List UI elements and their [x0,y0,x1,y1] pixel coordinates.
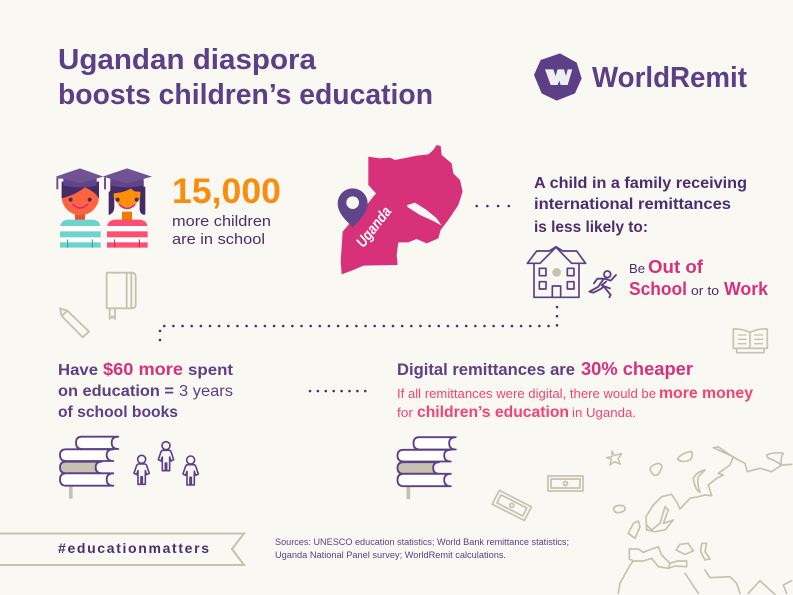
text: out of school or to work [629,256,769,299]
icon: banknote [548,476,583,491]
text: digital remittances cheaper [397,358,753,421]
text: child less likely: international remittances [534,196,731,213]
icon: school house [527,247,586,297]
text: digital remittances cheaper: 30% cheaper [581,358,693,379]
text: digital remittances cheaper: more money [659,385,753,402]
text: out of school or to work: Work [724,278,769,299]
icon: running child [589,271,616,297]
icon: open book [733,329,767,353]
text: $60 more spent on education: of school books [58,404,178,421]
sources [275,537,569,560]
child two [103,168,152,248]
text: out of school or to work: Be [629,262,645,276]
Middle East and Asia coast [685,570,792,594]
child one [56,168,103,248]
Novaya Zemlya [693,470,705,492]
text: $60 more spent on education [58,359,233,421]
text: digital remittances cheaper: If all remittances were digital, there would be [397,387,656,401]
text: $60 more spent on education: 3 years [179,383,233,400]
text: child less likely: is less likely to: [534,219,648,236]
sources: Uganda National Panel survey; WorldRemit calculations. [275,550,506,560]
stat: 15,000 more children: more children [172,213,271,230]
text: digital remittances cheaper: children’s education [417,404,569,421]
title: Ugandan diaspora [58,44,317,76]
text: out of school or to work: or to [691,284,719,298]
text: $60 more spent on education: $60 more [103,359,183,379]
child figure two [158,442,174,471]
text: $60 more spent on education: Have [58,362,98,379]
connector: dotted line from house to spend text [160,307,557,347]
logo: WorldRemit: WorldRemit [592,62,747,94]
text: out of school or to work: Out of [648,256,704,277]
icon: notebook [107,273,136,319]
icon: pencil [60,308,89,337]
text: out of school or to work: School [629,278,687,299]
label: Uganda: Uganda [353,203,395,251]
text: $60 more spent on education: on education = [58,383,174,400]
connector: map to text [477,205,512,207]
sources: Sources: UNESCO education statistics; World Bank remittance statistics; [275,537,569,547]
map: Uganda [338,145,463,274]
stat: 15,000 more children: 15,000 [172,172,281,211]
icon: tilted banknote [492,490,531,521]
icon: three children [134,442,198,485]
ribbon: #educationmatters: #educationmatters [58,540,209,556]
stat: 15,000 more children [172,172,281,248]
text: child less likely: A child in a family receiving [534,175,747,192]
text: digital remittances cheaper: for [397,406,413,420]
icon: two graduate children [56,168,152,248]
child figure one [134,455,149,484]
text: digital remittances cheaper: Digital remittances are [397,361,575,379]
connector: spend text to digital text [310,390,366,392]
stat: 15,000 more children: are in school [172,231,265,248]
child figure three [183,456,198,485]
icon: location pin [338,188,368,227]
title: boosts children’s education [58,79,433,111]
ribbon: #educationmatters [0,534,244,565]
icon: star [607,451,622,465]
islands of the arctic [613,452,783,513]
Scandinavia [647,507,673,532]
text: $60 more spent on education: spent [188,362,233,379]
text: child less likely [534,175,747,236]
northern coastline [618,447,792,593]
icon: stack of books right [397,437,456,499]
background world map [607,447,792,594]
logo: WorldRemit [534,53,747,101]
Mediterranean and Black Sea [668,543,710,568]
icon: stack of books left [60,437,118,499]
text: digital remittances cheaper: in Uganda. [572,406,636,420]
title [58,44,433,111]
